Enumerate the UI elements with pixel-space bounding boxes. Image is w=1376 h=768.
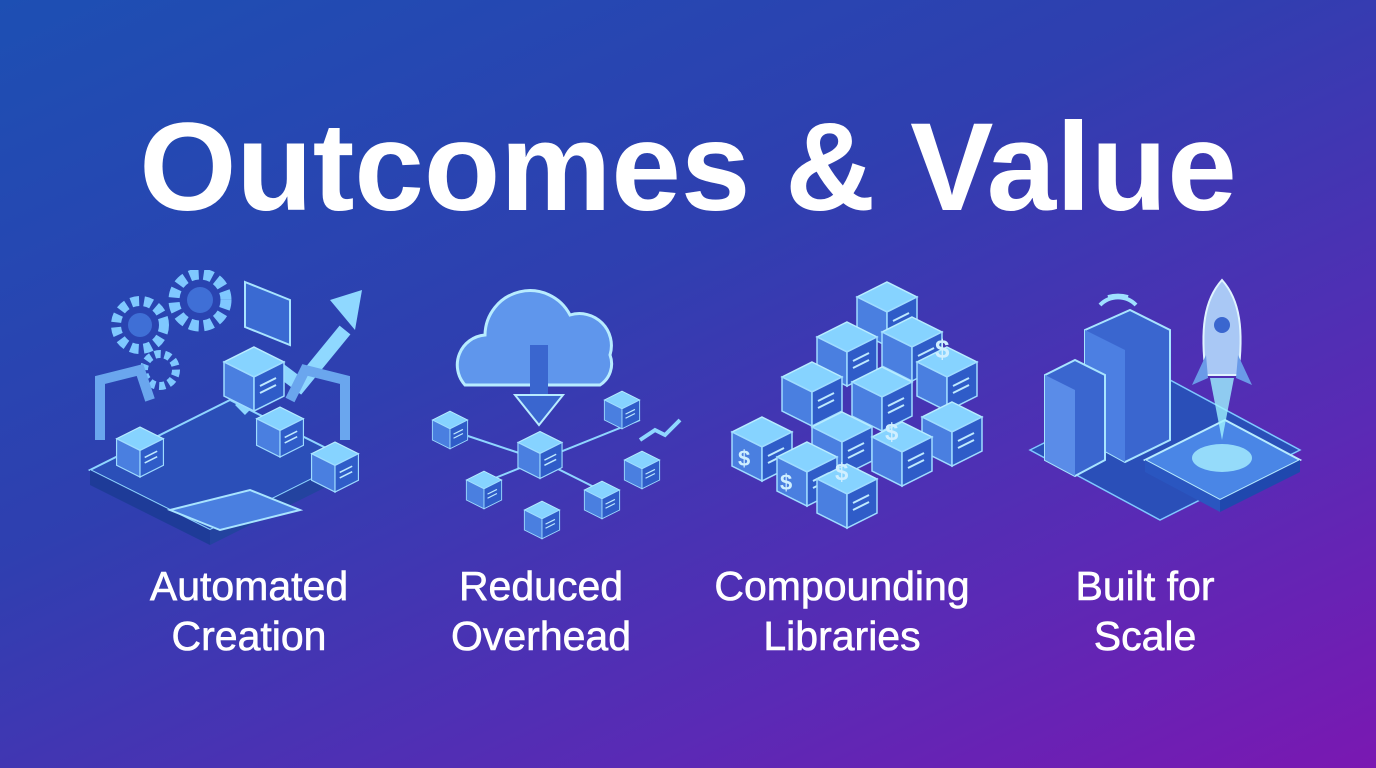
icon: compounding libraries [732, 282, 982, 528]
icon: compounding libraries: $ [738, 446, 750, 471]
label: reduced overhead: Overhead [451, 613, 631, 659]
label: automated creation: Automated [150, 563, 348, 609]
icon: compounding libraries: $ [780, 470, 792, 495]
label: compounding libraries [714, 563, 970, 659]
label: built for scale: Built for [1076, 563, 1214, 609]
icon: compounding libraries: $ [935, 334, 950, 364]
label: automated creation [150, 563, 348, 659]
illustrations [88, 270, 1302, 545]
title: Outcomes & Value [139, 98, 1237, 237]
icon: reduced overhead [432, 291, 680, 539]
label: compounding libraries: Libraries [763, 613, 921, 659]
label: reduced overhead: Reduced [459, 563, 623, 609]
label: automated creation: Creation [172, 613, 326, 659]
label: compounding libraries: Compounding [714, 563, 970, 609]
icon: built for scale [1030, 280, 1300, 520]
icon: compounding libraries: $ [885, 419, 899, 446]
icon: compounding libraries: $ [835, 459, 849, 486]
label: reduced overhead [451, 563, 631, 659]
label: built for scale [1076, 563, 1214, 659]
icon: automated creation [90, 274, 362, 545]
label: built for scale: Scale [1094, 613, 1196, 659]
